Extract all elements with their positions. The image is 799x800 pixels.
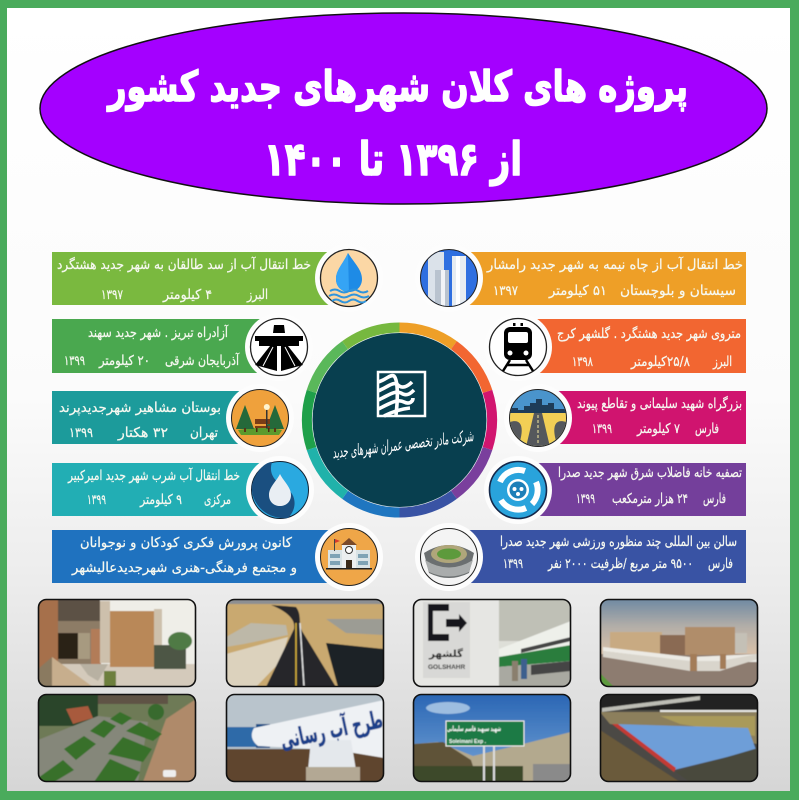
text: آذربایجان شرقی	[165, 352, 240, 369]
text: و مجتمع فرهنگی-هنری شهرجدیدعالیشهر	[71, 559, 297, 576]
row: Tabriz freeway	[52, 313, 313, 381]
logo mark	[378, 372, 425, 416]
pipeline lettering: طرح آب رسانی	[277, 705, 385, 754]
icon: pipes	[420, 249, 483, 307]
text: بزرگراه شهید سلیمانی و تقاطع پیوند	[577, 395, 742, 412]
row: Amirkabir water line	[52, 456, 314, 524]
text: کانون پرورش فکری کودکان و نوجوانان	[80, 535, 293, 551]
text: ۱۳۹۹	[576, 491, 595, 507]
text: ۷ کیلومتر	[636, 421, 680, 437]
text	[71, 535, 297, 576]
text	[59, 400, 221, 441]
text: البرز	[246, 287, 268, 303]
bar	[535, 319, 746, 373]
text: ۴ کیلومتر	[162, 287, 212, 303]
icon: park	[226, 384, 294, 452]
icon: stadium	[415, 523, 483, 591]
text: فارس	[703, 491, 726, 507]
coloured ring segments	[307, 328, 492, 512]
dark centre disc	[312, 333, 486, 507]
photo: indoor sports hall	[600, 694, 758, 782]
icon: water recycling	[484, 456, 552, 524]
row: Soleimani expressway	[509, 389, 746, 447]
text	[577, 395, 742, 437]
text: آزادراه تبریز . شهر جدید سهند	[88, 324, 229, 341]
photo: highway through hills	[226, 599, 384, 687]
text: ۱۳۹۷	[493, 283, 518, 299]
text: سیستان و بلوچستان	[620, 283, 736, 299]
text	[558, 465, 742, 507]
photo: Soleimani expressway sign: Soleimani Exp .	[449, 739, 487, 745]
row: Sadra wastewater plant	[484, 456, 746, 524]
row: Hashtgerd metro	[484, 313, 746, 381]
text	[67, 467, 240, 508]
text: تهران	[190, 425, 218, 441]
icon: interchange	[509, 389, 572, 447]
text: خط انتقال آب از سد طالقان به شهر جدید هشتگرد	[57, 256, 311, 273]
text: مرکزی	[204, 492, 231, 508]
row: Taleghan water line	[52, 244, 383, 312]
bar	[52, 463, 262, 516]
bar	[465, 252, 746, 305]
icon: highway	[245, 313, 313, 381]
icon: school	[315, 523, 383, 591]
text: خط انتقال آب شرب شهر جدید امیرکبیر	[67, 467, 240, 484]
text	[486, 256, 743, 299]
text: تصفیه خانه فاضلاب شرق شهر جدید صدرا	[558, 465, 742, 481]
text	[64, 324, 240, 369]
text: ۲۵/۸کیلومتر	[630, 354, 690, 370]
icon: train	[484, 313, 552, 381]
text	[557, 325, 741, 370]
text: فارس	[695, 421, 719, 437]
central circular logo	[307, 328, 492, 512]
row: children's centre	[52, 523, 383, 591]
road sign text: شهید سپهبد قاسم سلیمانی	[447, 725, 501, 733]
text: ۱۳۹۸	[572, 354, 593, 370]
text	[500, 534, 737, 572]
company name: شرکت مادر تخصصی عمران شهرهای جدید	[331, 426, 475, 462]
text: ۱۳۹۹	[87, 492, 106, 508]
photo: cultural complex rendering	[600, 599, 758, 687]
bar	[52, 319, 262, 373]
text: ۱۳۹۹	[592, 421, 612, 437]
photo: aerial view of park	[38, 694, 196, 782]
text: ۹ کیلومتر	[139, 492, 182, 508]
photo: Golshahr metro station	[413, 599, 571, 687]
text: ۲۴ هزار مترمکعب	[612, 491, 688, 507]
text: ۱۳۹۹	[69, 425, 93, 441]
photo: Golshahr metro station: GOLSHAHR	[428, 664, 466, 671]
text: ۹۵۰۰ متر مربع /ظرفیت ۲۰۰۰ نفر	[547, 556, 693, 572]
text: البرز	[712, 354, 732, 370]
photo: children's centre entrance	[38, 599, 196, 687]
row: park of notables	[52, 384, 294, 452]
row: Sadra sports hall	[415, 523, 746, 591]
bar	[535, 463, 746, 516]
text: سالن بین المللی چند منظوره ورزشی شهر جدید صدرا	[500, 534, 737, 550]
text: خط انتقال آب از چاه نیمه به شهر جدید رامشار	[486, 256, 743, 273]
title line 2: از ۱۳۹۶ تا ۱۴۰۰	[264, 132, 522, 186]
title ellipse	[40, 13, 767, 204]
photo: Soleimani expressway sign	[413, 694, 571, 782]
text: ۱۳۹۷	[101, 287, 123, 303]
text: متروی شهر جدید هشتگرد . گلشهر کرج	[557, 325, 741, 342]
text	[57, 256, 311, 303]
row: Ramshar water line	[420, 249, 746, 307]
bar	[52, 252, 337, 305]
bar	[52, 530, 337, 583]
bar	[52, 391, 242, 444]
icon: water drop	[315, 244, 383, 312]
photo: water supply pipeline	[226, 694, 385, 782]
icon: drinking water drop	[246, 456, 314, 524]
sign text: گلشهر	[428, 647, 463, 660]
text: ۲۰ کیلومتر	[98, 353, 150, 369]
text: ۵۱ کیلومتر	[548, 283, 607, 299]
bar	[555, 391, 746, 444]
text: بوستان مشاهیر شهرجدیدپرند	[59, 400, 221, 416]
text: ۳۲ هکتار	[117, 425, 168, 441]
text: ۱۳۹۹	[64, 353, 85, 369]
bar	[465, 530, 746, 583]
text: ۱۳۹۹	[503, 556, 523, 572]
text: فارس	[708, 556, 733, 572]
